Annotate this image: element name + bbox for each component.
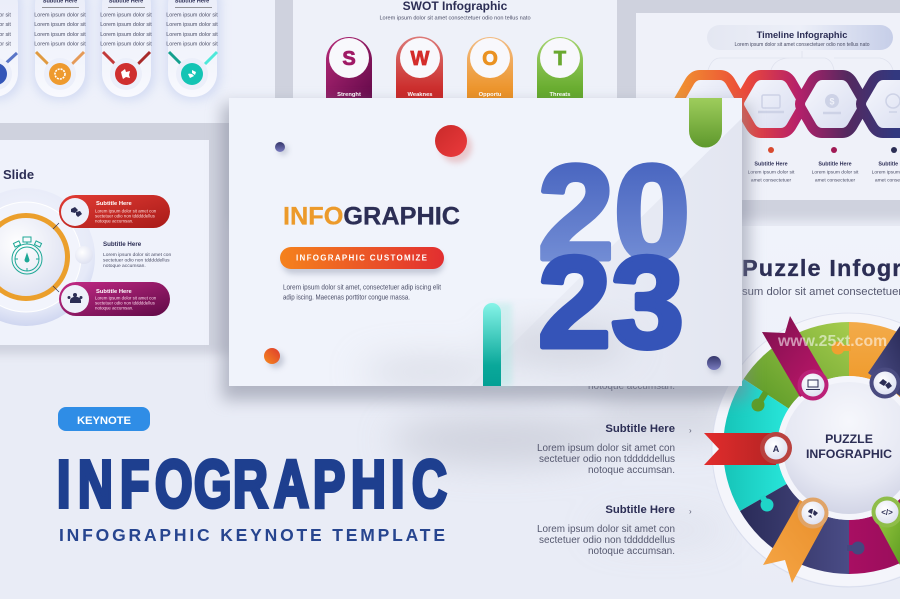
ribbon: magenta [762, 316, 828, 400]
callout: plain text with knob: Lorem ipsum dolor sit amet con [103, 252, 172, 258]
ribbon: green [872, 496, 900, 565]
callout: plain text with knob [75, 241, 172, 269]
timeline item 2: amet consectetuer [815, 178, 855, 184]
SWOT card T [537, 37, 583, 98]
callout: magenta pill [59, 282, 170, 316]
main card shadow [222, 104, 749, 400]
column 4: teal: Lorem ipsum dolor sit [166, 12, 218, 18]
wheel hub: INFOGRAPHIC [806, 447, 892, 461]
keynote badge: KEYNOTE [77, 415, 131, 427]
column 4: teal: Lorem ipsum dolor sit [166, 32, 218, 38]
SWOT card O: Opportu [479, 92, 502, 98]
column 2: orange: Lorem ipsum dolor sit [34, 32, 86, 38]
subtitle: INFOGRAPHIC KEYNOTE TEMPLATE [59, 525, 445, 545]
timeline heading pill: Lorem ipsum dolor sit amet consectetuer odio non tellus nato [734, 42, 870, 48]
icon: laptop [758, 95, 784, 112]
column 2: orange [34, 0, 86, 97]
timeline heading pill [707, 25, 893, 50]
card body text [283, 284, 441, 302]
callout: plain text with knob: sectetuer odio non tdddddellus [103, 258, 170, 264]
column 4: teal: Lorem ipsum dolor sit [166, 22, 218, 28]
callout: red pill [59, 195, 170, 228]
ribbon: green: </> [881, 508, 893, 517]
wheel segment: cyan [723, 379, 789, 511]
column 4: teal [166, 0, 218, 97]
card body text: adip iscing. Maecenas porttitor congue massa. [283, 294, 410, 302]
ribbon: red: A [773, 444, 780, 454]
year numerals 20: 20 [538, 137, 690, 288]
callout: red pill: notoque accumsan. [95, 218, 133, 224]
panel: SWOT slide [293, 0, 617, 98]
list item 2: › [689, 507, 692, 516]
column 2: orange: Lorem ipsum dolor sit [34, 42, 86, 48]
list item 1: Lorem ipsum dolor sit amet con [537, 443, 675, 454]
column 2: orange: Lorem ipsum dolor sit [34, 22, 86, 28]
green tag [689, 98, 722, 148]
SWOT card S: S [342, 48, 356, 70]
column glows [0, 0, 221, 100]
SWOT card W: Weaknes [407, 92, 433, 98]
wheel hub: PUZZLE [825, 432, 873, 446]
wheel segment: orange [832, 322, 900, 409]
list item 2: Subtitle Here [605, 504, 675, 516]
card body text: Lorem ipsum dolor sit amet, consectetuer adip iscing elit [283, 284, 441, 292]
panel: puzzle slide background [753, 226, 900, 228]
SWOT subheading: Lorem ipsum dolor sit amet consectetuer odio non tellus nato [379, 16, 531, 22]
list item 2: sectetuer odio non tdddddellus [539, 535, 675, 546]
decorative ball: orange [264, 348, 284, 368]
ribbon: red [704, 432, 792, 465]
SWOT card S: Strenght [337, 92, 361, 98]
list item 1: sectetuer odio non tdddddellus [539, 454, 675, 465]
panel: main card [229, 98, 742, 386]
column 3: red: Lorem ipsum dolor sit [100, 42, 152, 48]
callout: magenta pill: Lorem ipsum dolor sit amet con [95, 296, 157, 300]
list item 2: notoque accumsan. [588, 546, 675, 557]
timeline item 2 [812, 147, 859, 184]
teal bar [483, 303, 512, 386]
background leaf shadows [396, 392, 720, 473]
callout: magenta pill: Subtitle Here [96, 289, 133, 295]
list item 1: notoque accumsan. [588, 465, 675, 476]
list item 1 [537, 423, 692, 476]
icon: bulb [886, 94, 900, 112]
wheel segment: magenta [847, 484, 900, 574]
list item 2 [537, 504, 692, 557]
list item 2: Lorem ipsum dolor sit amet con [537, 524, 675, 535]
SWOT card T: T [554, 48, 566, 70]
stopwatch dial [0, 188, 95, 326]
timeline item 1: Subtitle Here [754, 162, 788, 168]
callout: plain text with knob: Subtitle Here [103, 241, 142, 248]
keynote badge [58, 407, 150, 431]
clipped list text behind main card: notoque accumsan. [588, 381, 675, 392]
callout: magenta pill: notoque accumsan. [95, 306, 133, 310]
timeline heading pill: Timeline Infographic [757, 30, 847, 40]
column 4: teal: Lorem ipsum dolor sit [166, 42, 218, 48]
timeline item 1: amet consectetuer [751, 178, 791, 184]
timeline item 1: Lorem ipsum dolor sit [748, 170, 795, 176]
SWOT card T: Threats [550, 92, 570, 98]
callout: red pill: Subtitle Here [96, 201, 133, 207]
list item 1: › [689, 426, 692, 435]
card heading: INFOGRAPHIC [283, 202, 460, 230]
wheel hub [783, 382, 900, 514]
list item 1: Subtitle Here [605, 423, 675, 435]
panel: timeline slide [636, 13, 900, 200]
slide heading: Slide [3, 167, 34, 182]
column 2: orange: Lorem ipsum dolor sit [34, 12, 86, 18]
icon: coin: $ [829, 96, 835, 106]
watermark: www.25xt.com [777, 333, 887, 350]
card button: INFOGRAPHIC CUSTOMIZE [296, 254, 428, 262]
SWOT card W [396, 36, 443, 98]
icon: stopwatch [12, 237, 42, 274]
callout: red pill: sectetuer odio non tdddddellus [95, 214, 156, 218]
callout: plain text with knob: notoque accumsan. [103, 263, 146, 269]
decorative ball: red [435, 125, 472, 163]
timeline item 3 [872, 147, 900, 184]
panel: stopwatch slide [0, 140, 209, 345]
year numerals 23: 23 [538, 229, 684, 375]
SWOT card O [467, 37, 513, 98]
decorative ball: navy right [707, 356, 723, 373]
SWOT card O: O [482, 48, 498, 70]
column 1: blue [0, 0, 18, 97]
wheel segment: navy [740, 484, 849, 574]
SWOT card S [326, 37, 372, 98]
column 3: red: Lorem ipsum dolor sit [100, 32, 152, 38]
column 3: red: Lorem ipsum dolor sit [100, 22, 152, 28]
column 3: red [100, 0, 152, 97]
grey gaps between upper slides [0, 0, 900, 354]
card button [280, 247, 444, 274]
ribbon: navy [868, 326, 900, 398]
main title: INFOGRAPHIC [57, 447, 447, 522]
timeline item 2: Lorem ipsum dolor sit [812, 170, 859, 176]
SWOT card W: W [411, 48, 430, 70]
puzzle wheel [704, 312, 900, 587]
panel: icon columns slide [0, 0, 275, 123]
hexagon chain [678, 75, 900, 133]
icon: coin [823, 94, 841, 113]
callout: magenta pill: sectetuer odio non tdddddellus [95, 300, 156, 306]
wheel segment: green [744, 322, 849, 409]
timeline item 2: Subtitle Here [818, 162, 852, 168]
column 3: red: Lorem ipsum dolor sit [100, 12, 152, 18]
decorative ball: small navy [275, 142, 288, 155]
ribbon: orange [763, 498, 828, 583]
timeline item 1 [748, 147, 795, 184]
callout: red pill: Lorem ipsum dolor sit amet con [95, 208, 157, 214]
